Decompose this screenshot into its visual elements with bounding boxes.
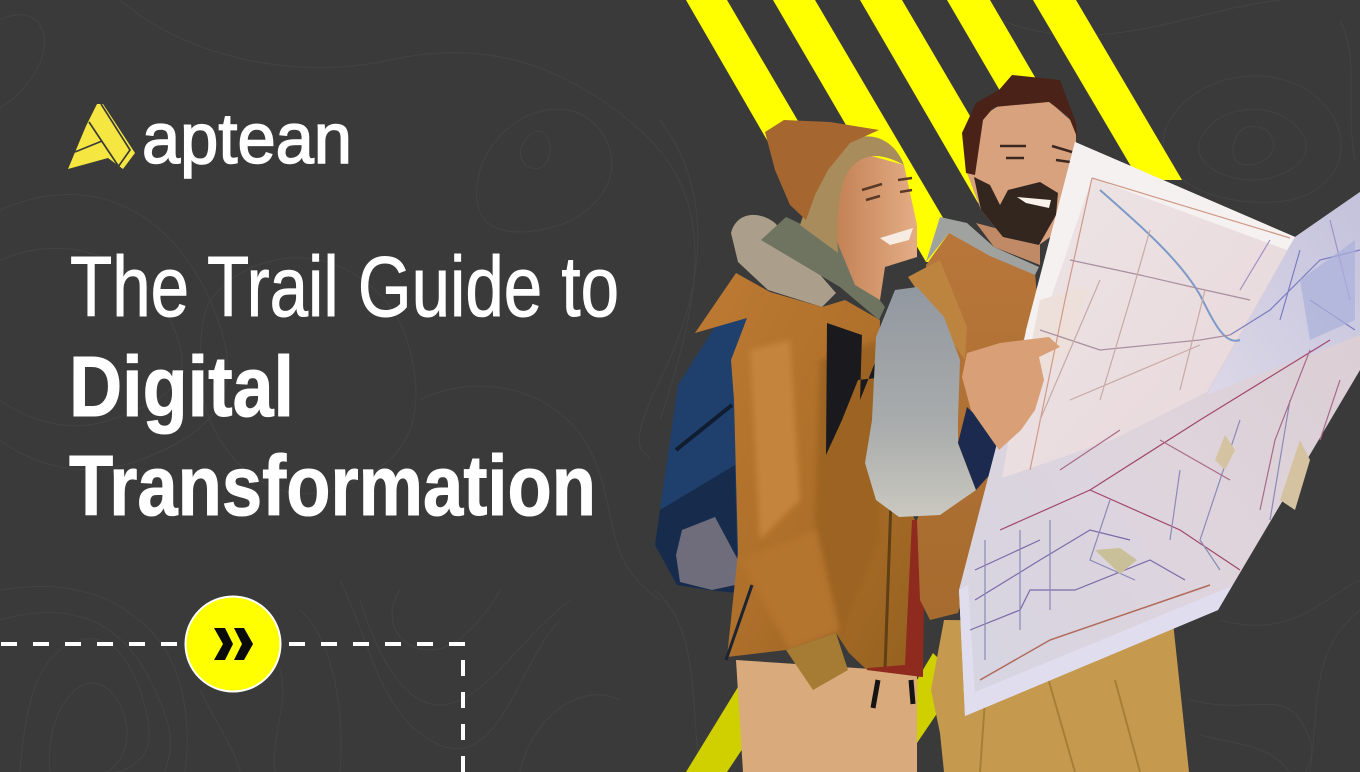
lime diagonal stripes bottom (686, 653, 1073, 772)
man eyes and brows (1000, 146, 1072, 162)
man neck (976, 223, 1040, 265)
arrow button (186, 596, 280, 692)
map blue tint (1300, 240, 1355, 340)
woman eyes and brow (862, 178, 912, 200)
map right panel (1207, 192, 1360, 395)
woman hair (800, 136, 904, 253)
map pale margin (1012, 142, 1295, 420)
map tan patches (1215, 435, 1310, 510)
navy cuff (958, 407, 1012, 490)
sweater arm (865, 287, 976, 517)
map shaded fold (1022, 285, 1090, 390)
title line 1: The Trail Guide to (70, 240, 619, 335)
strap (726, 585, 752, 660)
man pants (931, 620, 1189, 772)
man pants folds (980, 650, 1140, 772)
woman hood lining (761, 217, 885, 320)
woman pants (736, 660, 917, 772)
man face (967, 102, 1076, 245)
logo icon (68, 104, 135, 170)
zipper pulls (873, 680, 913, 708)
map lake (1095, 548, 1137, 574)
map top panel (1002, 142, 1295, 478)
woman shoulder strap (826, 323, 876, 455)
man hand (962, 337, 1060, 450)
title line 3 bold: Transformation (69, 439, 596, 534)
woman backpack (655, 318, 747, 593)
icon: double chevron (214, 628, 253, 660)
man collar (926, 217, 1039, 275)
map base (959, 142, 1360, 716)
map route lines (970, 178, 1360, 680)
people with map photo (655, 75, 1360, 772)
man vest (917, 233, 1040, 620)
woman neck and face (831, 150, 917, 300)
title (69, 240, 619, 534)
man backpack strap (908, 260, 967, 360)
man smile (1017, 197, 1051, 208)
jacket zipper (885, 500, 891, 670)
logo (68, 100, 352, 179)
logo wordmark: aptean (142, 100, 352, 179)
woman smile (880, 228, 913, 245)
dashed trail path (1, 644, 465, 772)
woman hood fur (731, 215, 836, 307)
yellow diagonal stripes top (686, 0, 1182, 262)
title line 2 bold: Digital (69, 340, 294, 435)
map bottom margin (959, 585, 1232, 716)
plaid lining (867, 520, 925, 677)
map sheet (959, 142, 1360, 716)
man hair (962, 75, 1077, 175)
woman cuff (786, 633, 848, 690)
woman hat (765, 120, 879, 220)
man beard (974, 177, 1058, 245)
woman jacket folds (750, 342, 877, 648)
woman jacket (695, 273, 922, 677)
